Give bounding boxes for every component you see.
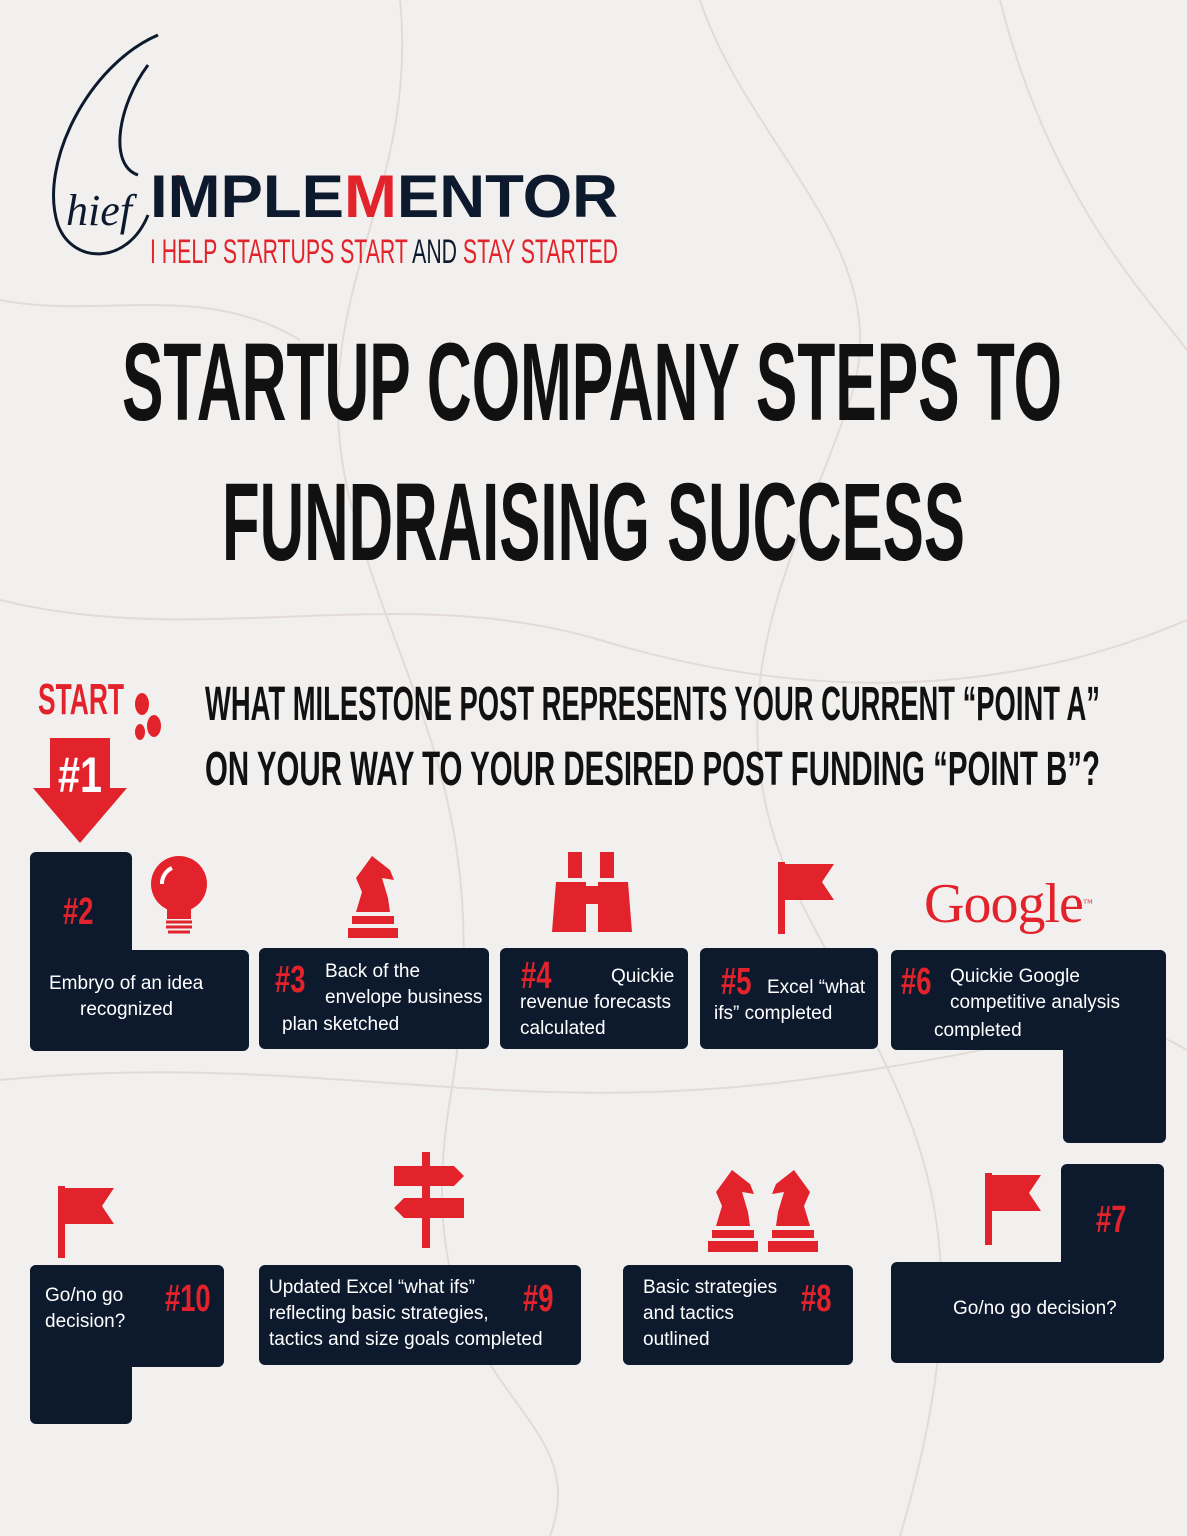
icon: signpost <box>394 1152 464 1248</box>
panel #6: Quickie Google <box>950 966 1080 987</box>
icon: chess knight <box>348 856 398 938</box>
panel #8: Basic strategies <box>643 1277 777 1298</box>
panel #8: and tactics <box>643 1303 734 1324</box>
panel #5: ifs” completed <box>714 1003 832 1024</box>
panel #8 <box>623 1265 853 1365</box>
panel #7: Go/no go decision? <box>953 1298 1117 1319</box>
panel #3: Back of the <box>325 961 420 982</box>
panel #6 <box>891 950 1166 1143</box>
panel #9 <box>259 1265 581 1365</box>
start marker: #1 <box>58 747 102 803</box>
panel #10: decision? <box>45 1311 125 1332</box>
logo: google: Google™ <box>924 873 1092 935</box>
panel #5: Excel “what <box>767 977 865 998</box>
panel #4: Quickie <box>611 966 674 987</box>
panel #4: #4 <box>521 955 551 997</box>
panel #3 <box>259 948 489 1049</box>
panel #7: #7 <box>1096 1199 1126 1241</box>
panel #4: calculated <box>520 1018 606 1039</box>
icon: flag 7 <box>985 1173 1041 1245</box>
panel #8: outlined <box>643 1329 710 1350</box>
icon: binoculars <box>552 852 632 932</box>
logo: IMPLEMENTOR <box>150 163 618 230</box>
panel #3: plan sketched <box>282 1014 399 1035</box>
panel #3: #3 <box>275 959 305 1001</box>
panel #3: envelope business <box>325 987 482 1008</box>
logo: hief <box>66 186 138 235</box>
panel #10 <box>30 1265 224 1424</box>
subheading <box>205 678 1100 796</box>
panel #5: #5 <box>721 961 751 1003</box>
panel #2: #2 <box>63 891 93 933</box>
title <box>122 321 1062 580</box>
panel #10: Go/no go <box>45 1285 123 1306</box>
panel #9: #9 <box>523 1278 553 1320</box>
panel #6: completed <box>934 1020 1022 1041</box>
icon: light bulb <box>151 856 207 934</box>
panel #9: tactics and size goals completed <box>269 1329 543 1350</box>
panel #5 <box>700 948 878 1049</box>
panel #2: recognized <box>80 999 173 1020</box>
icon: flag 10 <box>58 1186 114 1258</box>
logo <box>52 34 618 271</box>
panel #7 <box>891 1164 1164 1363</box>
panel #6: #6 <box>901 961 931 1003</box>
panel #4: revenue forecasts <box>520 992 671 1013</box>
panel #8: #8 <box>801 1278 831 1320</box>
panel #6: competitive analysis <box>950 992 1120 1013</box>
panel #9: reflecting basic strategies, <box>269 1303 489 1324</box>
panel #10: #10 <box>165 1278 211 1320</box>
start marker <box>33 675 161 843</box>
panel #2 <box>30 852 249 1051</box>
icon: two knights <box>708 1170 818 1252</box>
panel #9: Updated Excel “what ifs” <box>269 1277 475 1298</box>
panel #4 <box>500 948 688 1049</box>
icon: flag <box>778 862 834 934</box>
panel #2: Embryo of an idea <box>49 973 203 994</box>
